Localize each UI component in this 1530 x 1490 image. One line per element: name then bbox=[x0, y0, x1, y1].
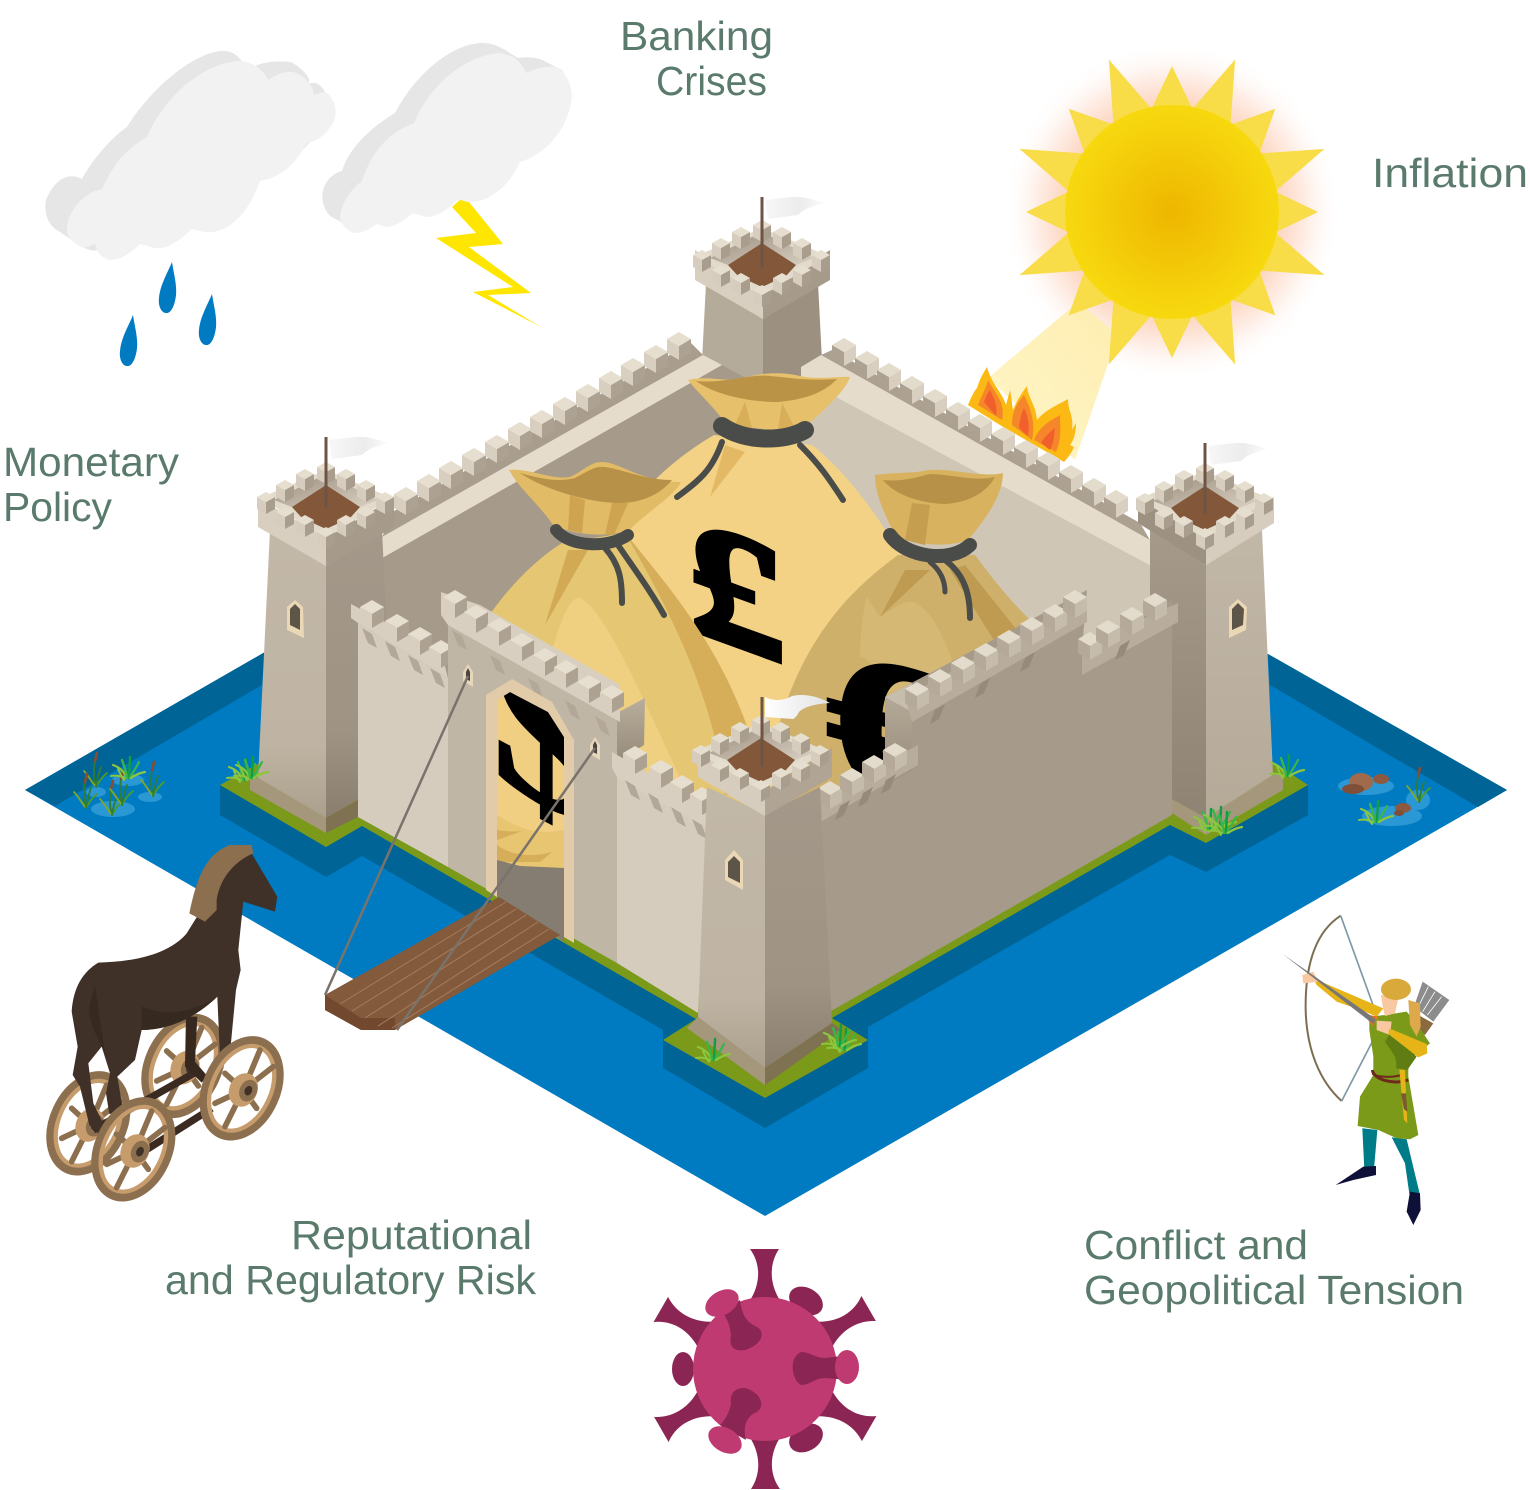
label: Banking Crises: Banking bbox=[620, 13, 773, 59]
money bag middle bbox=[620, 373, 960, 850]
moat water bbox=[25, 652, 1507, 1216]
left wall section bbox=[351, 600, 453, 867]
right tower bbox=[1136, 443, 1283, 835]
sun bbox=[1012, 52, 1332, 372]
arm front bbox=[1388, 1028, 1427, 1057]
archer bbox=[1283, 916, 1449, 1225]
hair bbox=[1381, 979, 1421, 1037]
bow bbox=[1306, 916, 1342, 1101]
arrow slits bbox=[463, 664, 600, 760]
far front leg bbox=[185, 1017, 207, 1083]
drawbridge bbox=[325, 676, 595, 1030]
horse shading bbox=[89, 985, 217, 1053]
gate opening bbox=[497, 692, 564, 942]
label: Inflation: Inflation bbox=[1372, 150, 1528, 196]
sun glow bbox=[1002, 42, 1342, 382]
left tower bbox=[250, 437, 394, 833]
cloud right bbox=[322, 43, 572, 233]
horse axles bbox=[93, 1072, 212, 1152]
label: Conflict and Geopolitical Tension: Geopolitical Tension bbox=[1084, 1267, 1464, 1313]
near wheels bbox=[81, 1028, 294, 1209]
gatehouse bbox=[441, 584, 645, 963]
lightning bolt bbox=[436, 199, 541, 327]
money bag left bbox=[460, 462, 770, 850]
top tower bbox=[693, 197, 830, 400]
arrow bbox=[1283, 954, 1378, 1026]
belt and dagger bbox=[1372, 1069, 1408, 1123]
horse mane bbox=[189, 845, 253, 922]
cloud left bbox=[45, 51, 336, 260]
pond rocks right bbox=[1338, 768, 1430, 826]
euro sign: € bbox=[826, 601, 954, 862]
dollar sign: $ bbox=[492, 584, 599, 880]
drawing arm bbox=[1313, 978, 1383, 1017]
window right tower bbox=[1229, 599, 1247, 638]
gate frame bbox=[486, 679, 574, 943]
tunic shade bbox=[1385, 1033, 1417, 1070]
shoes bbox=[1336, 1166, 1421, 1225]
label: Banking Crises: Crises bbox=[656, 58, 767, 104]
face and hand bbox=[1302, 972, 1398, 1035]
label: Reputational and Regulatory Risk: Reputational bbox=[291, 1212, 532, 1258]
label: Monetary Policy: Monetary bbox=[3, 439, 179, 485]
virus bbox=[653, 1249, 877, 1489]
horse body bbox=[72, 852, 277, 1137]
money bag right bbox=[775, 470, 1040, 862]
sun beam bbox=[988, 302, 1118, 460]
label: Monetary Policy: Policy bbox=[3, 484, 112, 530]
pound sign: £ bbox=[689, 482, 785, 699]
front flag bbox=[765, 695, 830, 719]
label: Reputational and Regulatory Risk: and Regulatory Risk bbox=[165, 1257, 536, 1303]
front tower bbox=[687, 695, 842, 1085]
far wheels bbox=[36, 1006, 236, 1183]
pond plants left bbox=[74, 753, 164, 817]
island and green bank bbox=[220, 760, 1308, 1128]
grass tufts bbox=[227, 755, 1304, 1062]
legs bbox=[1362, 1128, 1420, 1198]
drawbridge ropes bbox=[325, 676, 595, 1030]
label: Conflict and Geopolitical Tension: Conflict and bbox=[1084, 1222, 1308, 1268]
trojan horse bbox=[36, 845, 294, 1209]
front-left wall section right of gate bbox=[612, 746, 714, 1013]
bowstring bbox=[1341, 916, 1377, 1101]
window front tower bbox=[725, 850, 743, 890]
quiver and arrows bbox=[1413, 982, 1449, 1035]
tunic bbox=[1358, 1012, 1430, 1139]
window left tower bbox=[287, 600, 304, 638]
flames on wall bbox=[968, 367, 1076, 462]
front right wall bbox=[812, 590, 1178, 1014]
rain drops bbox=[120, 262, 216, 366]
back walls bbox=[382, 332, 1150, 780]
